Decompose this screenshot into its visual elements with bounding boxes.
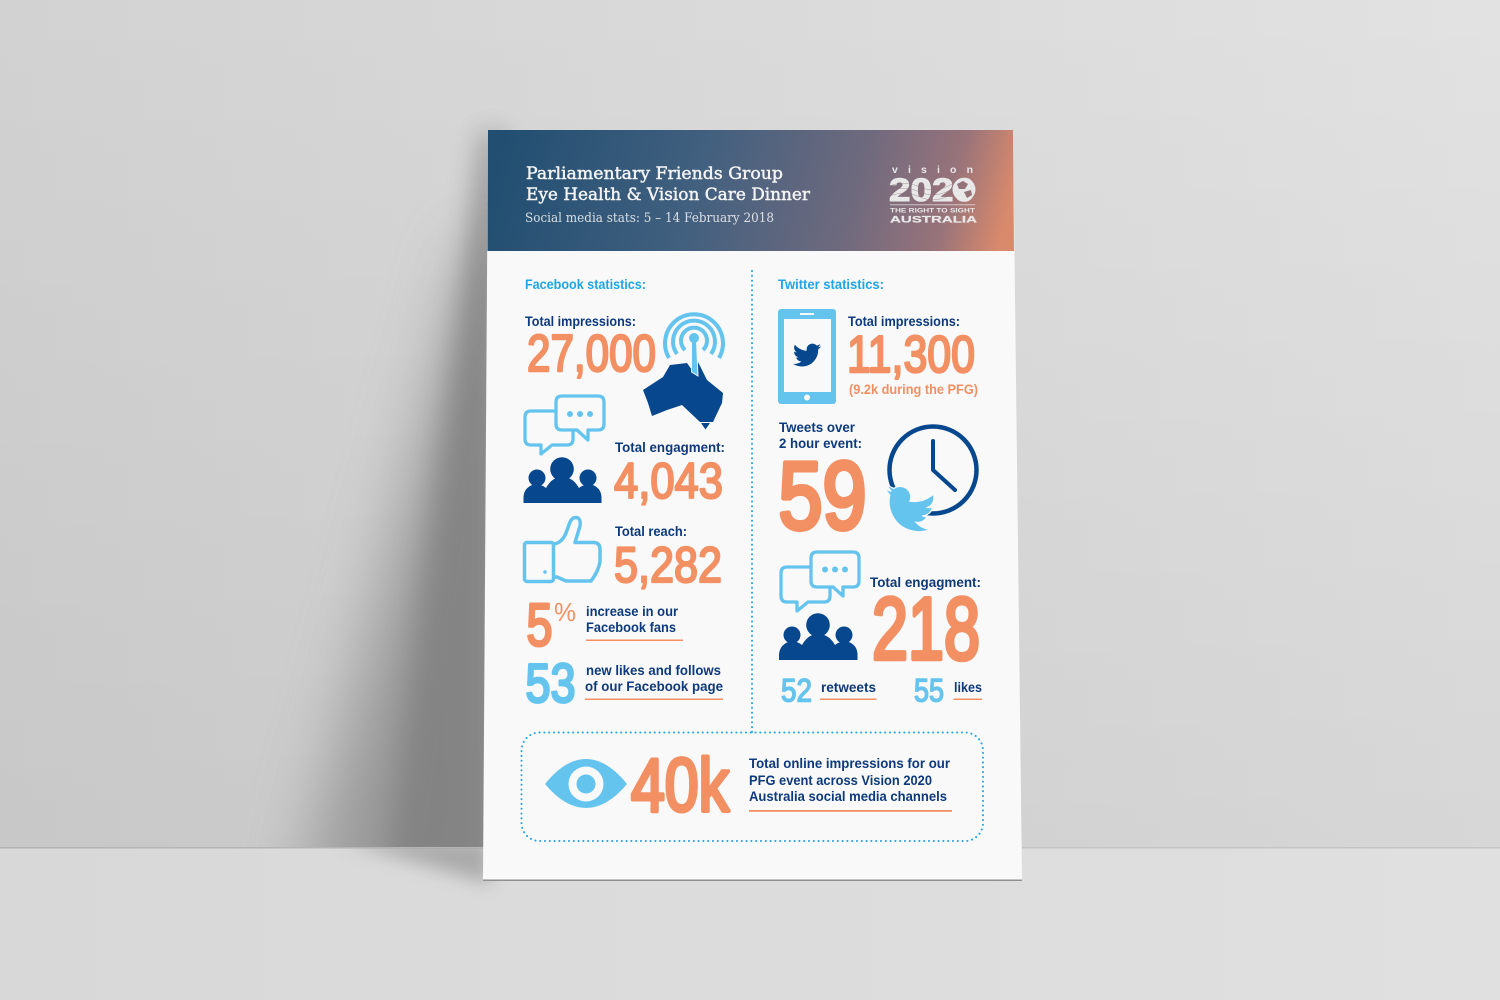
subtitle: Social media stats: 5 – 14 February 2018 [525, 211, 774, 226]
stat: 55 likes: likes [954, 679, 982, 695]
header band [488, 130, 1014, 251]
number: 218: 218 [872, 579, 980, 678]
logo: Vision 2020 Australia: AUSTRALIA [890, 214, 977, 226]
stat: 53: 53 [526, 652, 576, 714]
label: total engagement: Total engagment: [615, 439, 725, 455]
number: 11,300: 11,300 [847, 326, 975, 384]
number: 40k: 40k [631, 743, 729, 827]
label: total impressions: Total impressions: [848, 313, 960, 329]
poster bottom edge [483, 880, 1022, 881]
heading: Twitter: Twitter statistics: [778, 276, 884, 292]
poster sheet [483, 130, 1022, 880]
callout text [749, 755, 952, 812]
number: 4,043: 4,043 [614, 453, 723, 509]
floor [0, 847, 1500, 1000]
icon: Australia broadcast [643, 314, 723, 430]
poster floor shadow [356, 848, 494, 888]
logo: Vision 2020 Australia: THE RIGHT TO SIGHT [890, 208, 975, 214]
panel: Twitter statistics [778, 276, 982, 708]
stat: 55 likes [914, 672, 982, 708]
icon: eye [545, 759, 627, 808]
icon: thumbs up [524, 518, 600, 582]
callout: total online impressions [522, 732, 983, 841]
stat: 55 likes: 55 [914, 672, 944, 708]
stat: 5 percent [526, 592, 683, 658]
logo: Vision 2020 Australia: vision [892, 164, 973, 176]
stat: 5 percent: increase in our [586, 603, 679, 619]
title [526, 164, 811, 205]
heading: Facebook: Facebook statistics: [525, 276, 646, 292]
icon: phone with bird [778, 309, 836, 404]
stat: 5 percent: 5 [526, 592, 552, 658]
logo: Vision 2020 Australia: 2020 [889, 172, 975, 208]
label: tweets over 2 hour event: 2 hour event: [779, 435, 862, 451]
stat: 53: of our Facebook page [585, 678, 723, 694]
title: Eye Health & Vision Care Dinner [526, 185, 811, 205]
icon: chat bubbles [525, 396, 604, 454]
callout text: Australia social media channels [749, 788, 947, 804]
stat: 53: new likes and follows [586, 662, 721, 678]
stat: 52 retweets: 52 [781, 672, 812, 708]
note: during the PFG: (9.2k during the PFG) [849, 381, 978, 397]
icon: clock with bird [879, 426, 976, 534]
stat: 52 retweets [781, 672, 876, 708]
panel: Facebook statistics [524, 276, 725, 714]
label: total reach: Total reach: [615, 523, 687, 539]
callout text: PFG event across Vision 2020 [749, 772, 932, 788]
logo: Vision 2020 Australia [889, 164, 977, 226]
callout text: Total online impressions for our [749, 755, 951, 771]
icon: chat bubbles [781, 552, 859, 611]
number: 59: 59 [778, 442, 866, 550]
poster shadow on wall [300, 132, 500, 900]
title: Parliamentary Friends Group [526, 164, 783, 184]
icon: people [524, 457, 602, 503]
stat: 53 [526, 652, 723, 714]
column divider [751, 271, 753, 732]
stat: 5 percent: % [554, 597, 576, 627]
number: 5,282: 5,282 [614, 537, 722, 593]
label: tweets over 2 hour event [779, 419, 862, 451]
number: 27,000: 27,000 [527, 325, 656, 383]
stat: 52 retweets: retweets [821, 679, 876, 695]
label: total engagement: Total engagment: [870, 574, 981, 590]
icon: people [779, 613, 858, 660]
label: total impressions: Total impressions: [525, 313, 636, 329]
stat: 5 percent: Facebook fans [586, 619, 676, 635]
label: tweets over 2 hour event: Tweets over [779, 419, 856, 435]
